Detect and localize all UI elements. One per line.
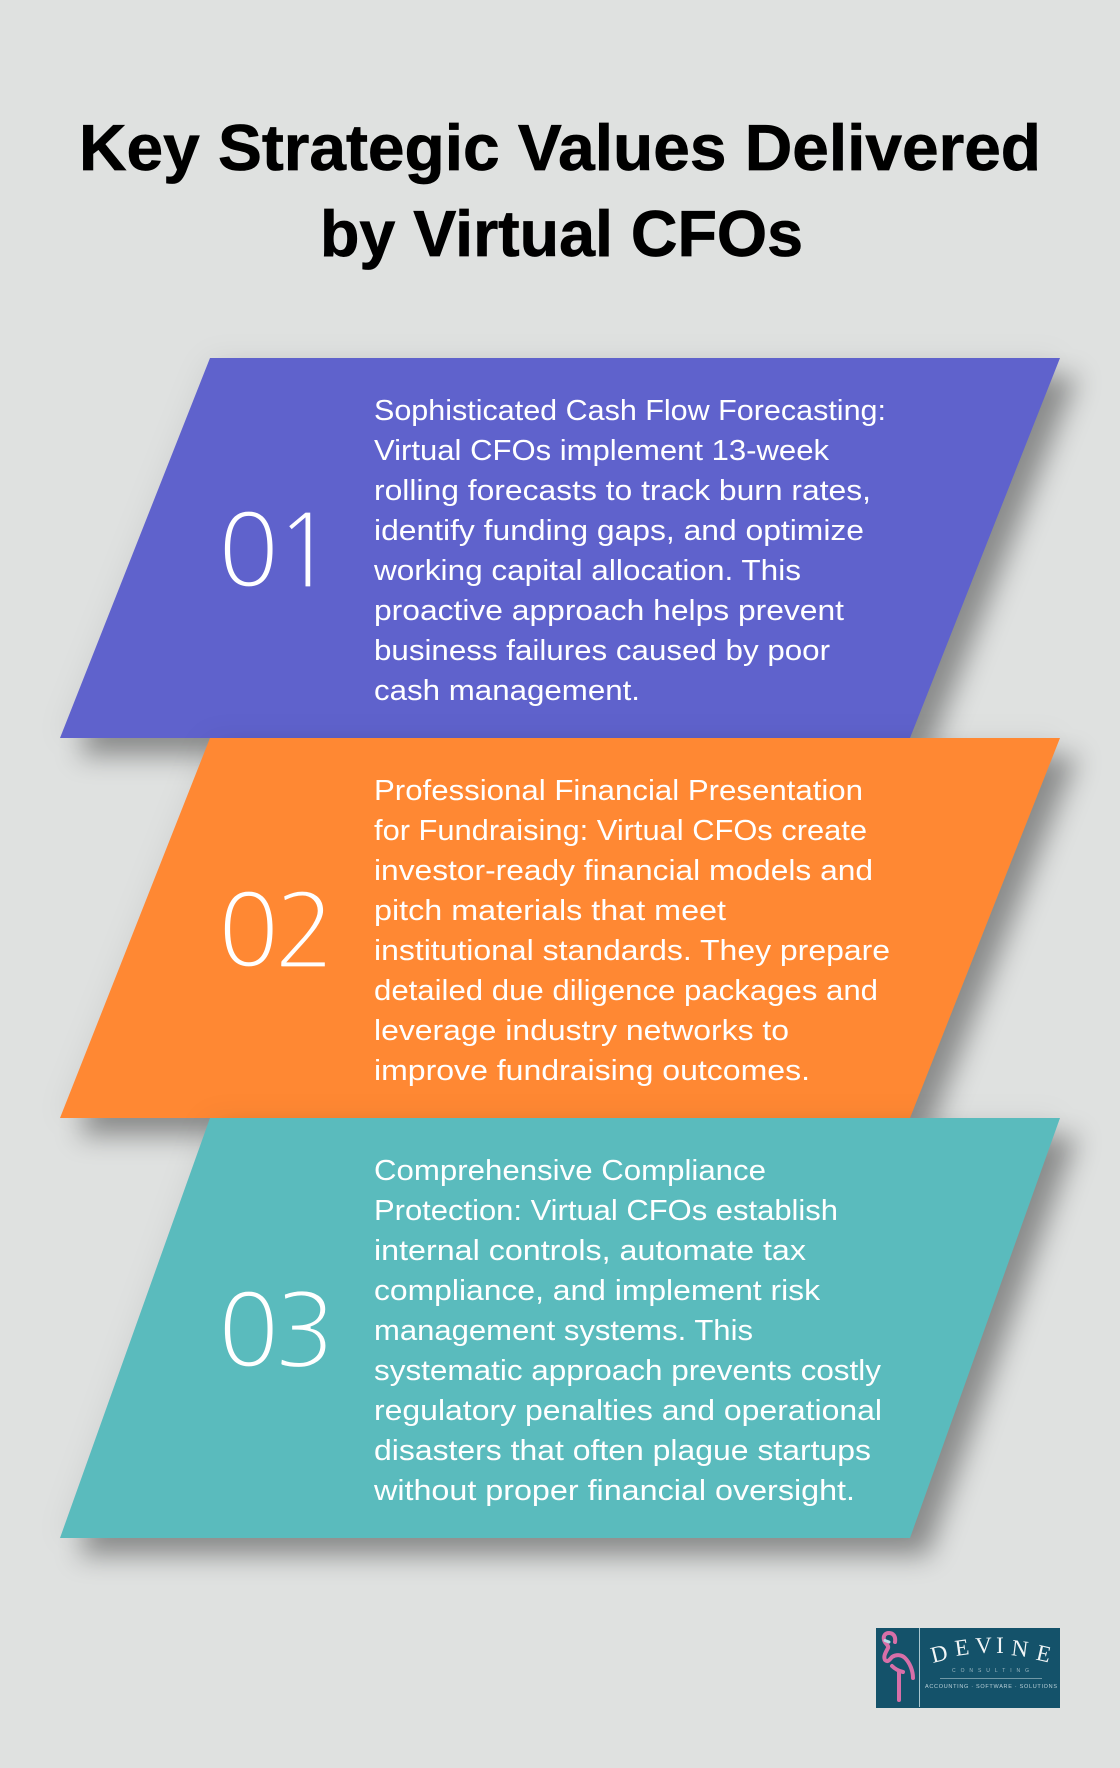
number 01: 01 <box>218 500 330 602</box>
panel: 03 compliance protection <box>60 1118 1060 1538</box>
panel 02 text: investor-ready financial models and <box>374 855 873 887</box>
panel: 02 financial presentation for fundraising <box>60 738 1060 1118</box>
panel 01 background <box>60 358 1060 738</box>
title: by Virtual CFOs <box>320 197 803 270</box>
title <box>79 111 1041 270</box>
logo wordmark: I <box>996 1633 1004 1658</box>
panel 02 text: leverage industry networks to <box>374 1015 789 1047</box>
panel: 01 cash flow forecasting <box>60 358 1060 738</box>
panel 03 text: compliance, and implement risk <box>374 1275 821 1307</box>
panel 03 text: Comprehensive Compliance <box>374 1155 766 1187</box>
icon: flamingo <box>884 1633 913 1700</box>
title: Key Strategic Values Delivered <box>79 111 1041 184</box>
number 03: 03 <box>218 1280 330 1382</box>
logo: Devine Consulting <box>876 1628 1060 1708</box>
panel 01 text: identify funding gaps, and optimize <box>374 515 864 547</box>
number 02: 02 <box>218 880 330 982</box>
panel 01 text: Sophisticated Cash Flow Forecasting: <box>374 395 886 427</box>
logo wordmark: N <box>1010 1635 1030 1662</box>
panel 02 text: for Fundraising: Virtual CFOs create <box>374 815 867 847</box>
panel 03 text: without proper financial oversight. <box>373 1475 855 1507</box>
logo tagline: ACCOUNTING · SOFTWARE · SOLUTIONS <box>925 1684 1057 1690</box>
logo wordmark: D <box>928 1640 950 1668</box>
logo wordmark <box>928 1633 1053 1668</box>
panel 03 text: Protection: Virtual CFOs establish <box>374 1195 838 1227</box>
logo wordmark: E <box>953 1634 971 1661</box>
panel 02 text: improve fundraising outcomes. <box>374 1055 810 1087</box>
panel 03 text: disasters that often plague startups <box>374 1435 871 1467</box>
panel 01 text: business failures caused by poor <box>374 635 831 667</box>
panel 02 text: pitch materials that meet <box>374 895 726 927</box>
panel 03 text: management systems. This <box>374 1315 753 1347</box>
panel 03 background <box>60 1118 1060 1538</box>
logo wordmark: E <box>1034 1640 1053 1667</box>
panel 02 text <box>374 775 890 1087</box>
panel 02 background <box>60 738 1060 1118</box>
panel 01 text: proactive approach helps prevent <box>374 595 844 627</box>
panel 03 text: regulatory penalties and operational <box>374 1395 882 1427</box>
logo wordmark: V <box>975 1633 993 1658</box>
logo subtitle: CONSULTING <box>952 1668 1029 1674</box>
panel 01 text: working capital allocation. This <box>373 555 801 587</box>
panel 02 text: institutional standards. They prepare <box>374 935 890 967</box>
panel 02 text: detailed due diligence packages and <box>374 975 878 1007</box>
panel 02 text: Professional Financial Presentation <box>374 775 863 807</box>
panel 01 text: rolling forecasts to track burn rates, <box>374 475 871 507</box>
panel 03 text: internal controls, automate tax <box>374 1235 806 1267</box>
panel 01 text: cash management. <box>374 675 640 707</box>
panel 03 text <box>373 1155 882 1507</box>
panel 03 text: systematic approach prevents costly <box>374 1355 882 1387</box>
panel 01 text <box>373 395 886 707</box>
panel 01 text: Virtual CFOs implement 13-week <box>374 435 830 467</box>
